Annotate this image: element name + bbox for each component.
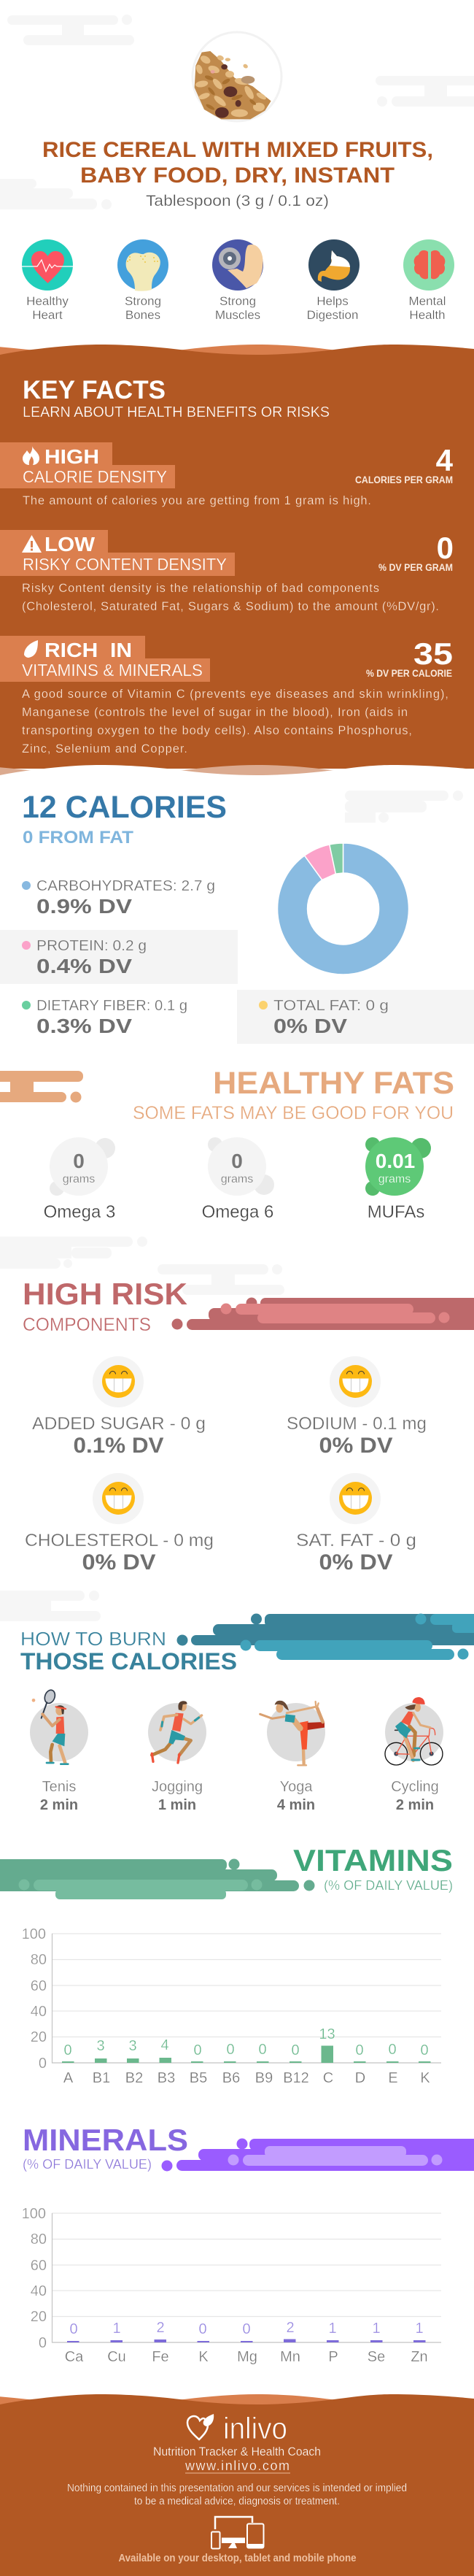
fact: rich in vitamins and minerals: Manganese (controls the level of sugar in the blood), Iron (aids in bbox=[22, 706, 408, 719]
bar chart: vitamins: K bbox=[420, 2070, 430, 2086]
bar chart: minerals: 80 bbox=[31, 2231, 47, 2248]
fact: low risky content density: 0 bbox=[437, 531, 454, 565]
header: food photo bbox=[193, 32, 281, 121]
icon: devices bbox=[211, 2517, 264, 2549]
high risk heading: HIGH RISK bbox=[23, 1277, 187, 1311]
fact: high calorie density: HIGH bbox=[44, 445, 99, 468]
bar chart: vitamins: 40 bbox=[31, 2004, 47, 2020]
panel: key facts bbox=[0, 345, 474, 780]
bar chart: minerals: P bbox=[328, 2349, 338, 2365]
bar chart: vitamins: 100 bbox=[22, 1926, 46, 1942]
minerals subheading: (% OF DAILY VALUE) bbox=[23, 2157, 152, 2172]
bar chart: minerals: 1 bbox=[372, 2321, 381, 2337]
macro: dietary fiber bbox=[22, 998, 187, 1037]
burn heading: THOSE CALORIES bbox=[20, 1648, 237, 1675]
macro: carbohydrates: CARBOHYDRATES: 2.7 g bbox=[36, 878, 215, 894]
benefit: strong bones: Bones bbox=[125, 308, 160, 322]
title: BABY FOOD, DRY, INSTANT bbox=[80, 164, 395, 188]
risk: sodium: SODIUM - 0.1 mg bbox=[287, 1414, 427, 1434]
benefit: mental health: Health bbox=[409, 308, 446, 322]
fact: low risky content density: Risky Content density is the relationship of bad components bbox=[22, 582, 379, 595]
donut chart bbox=[278, 843, 409, 974]
title bbox=[42, 138, 433, 188]
fact: rich in vitamins and minerals: A good source of Vitamin C (prevents eye diseases and skin wrinkling), bbox=[22, 688, 448, 701]
fact: low risky content density: RISKY CONTENT DENSITY bbox=[23, 555, 227, 574]
fact: high calorie density: 4 bbox=[436, 443, 454, 477]
bar chart: vitamins: 0 bbox=[291, 2042, 300, 2058]
bar chart: minerals: Cu bbox=[107, 2349, 126, 2365]
risk: added sugar: 0.1% DV bbox=[73, 1434, 163, 1458]
bar chart: vitamins bbox=[22, 1926, 441, 2086]
bar chart: vitamins: B5 bbox=[190, 2070, 207, 2086]
minerals heading: MINERALS bbox=[23, 2123, 188, 2157]
bar chart: vitamins: 20 bbox=[31, 2029, 47, 2045]
fat: mufas: 0.01 bbox=[376, 1150, 415, 1172]
bar chart: minerals: 0 bbox=[69, 2321, 78, 2337]
bar chart: vitamins: B1 bbox=[93, 2070, 110, 2086]
benefit: healthy heart bbox=[22, 239, 73, 322]
bar chart: minerals bbox=[22, 2206, 441, 2365]
icon: grinning face bbox=[102, 1365, 135, 1398]
fact: rich in vitamins and minerals: VITAMINS & MINERALS bbox=[22, 661, 203, 680]
bar chart: minerals: 1 bbox=[328, 2321, 337, 2337]
icon: grinning face bbox=[339, 1482, 372, 1515]
fat: omega 6 bbox=[202, 1137, 274, 1222]
fact: high calorie density bbox=[0, 442, 454, 507]
bar chart: minerals: 2 bbox=[156, 2320, 165, 2336]
benefit: helps digestion bbox=[307, 239, 360, 322]
fact: rich in vitamins and minerals: 35 bbox=[413, 637, 453, 671]
bar chart: vitamins: 0 bbox=[355, 2042, 364, 2058]
bar chart: vitamins: E bbox=[388, 2070, 398, 2086]
exercise: tennis bbox=[30, 1688, 88, 1813]
fat: omega 3 bbox=[44, 1137, 115, 1222]
risk: saturated fat: SAT. FAT - 0 g bbox=[296, 1531, 416, 1550]
bar chart: vitamins: 0 bbox=[258, 2042, 267, 2058]
benefit: healthy heart: Heart bbox=[32, 308, 63, 322]
bar chart: minerals: 0 bbox=[198, 2321, 207, 2337]
bar chart: minerals: 0 bbox=[242, 2321, 251, 2337]
burn heading bbox=[20, 1628, 237, 1675]
fact: rich in vitamins and minerals: RICH IN bbox=[44, 639, 132, 661]
bar chart: vitamins: B2 bbox=[125, 2070, 143, 2086]
benefit: helps digestion: Helps bbox=[316, 294, 349, 308]
benefit: mental health: Mental bbox=[408, 294, 446, 308]
vitamins subheading: (% OF DAILY VALUE) bbox=[324, 1878, 453, 1893]
benefit: strong muscles bbox=[212, 239, 263, 322]
burn banner shape bbox=[176, 1613, 474, 1660]
bar chart: minerals: 60 bbox=[31, 2258, 47, 2274]
fat: mufas: MUFAs bbox=[368, 1202, 424, 1222]
macro: protein: PROTEIN: 0.2 g bbox=[36, 938, 147, 954]
macro: carbohydrates bbox=[22, 878, 215, 918]
exercise: jogging: Jogging bbox=[152, 1779, 203, 1795]
macro: protein bbox=[0, 930, 238, 984]
fat: omega 6: grams bbox=[221, 1173, 253, 1185]
macro: total fat bbox=[237, 990, 474, 1044]
fat: omega 6: Omega 6 bbox=[202, 1202, 273, 1222]
availability note: Available on your desktop, tablet and mobile phone bbox=[118, 2552, 356, 2564]
macro: dietary fiber: DIETARY FIBER: 0.1 g bbox=[36, 998, 187, 1014]
bar chart: vitamins: B9 bbox=[255, 2070, 273, 2086]
benefit: mental health bbox=[403, 239, 454, 322]
fact: high calorie density: CALORIES PER GRAM bbox=[355, 474, 453, 485]
bar chart: minerals: Zn bbox=[411, 2349, 428, 2365]
fact: rich in vitamins and minerals: transporting oxygen to the body cells). Also contains Phosphorus, bbox=[22, 724, 412, 737]
risk: cholesterol: 0% DV bbox=[82, 1550, 156, 1575]
icon: warning bbox=[22, 535, 42, 553]
key facts subheading: LEARN ABOUT HEALTH BENEFITS OR RISKS bbox=[23, 404, 330, 420]
panel: footer bbox=[0, 2394, 474, 2576]
bar chart: vitamins: C bbox=[323, 2070, 333, 2086]
bar chart: minerals: Ca bbox=[65, 2349, 84, 2365]
healthy fats banner shape bbox=[0, 1071, 83, 1102]
bar chart: minerals: 0 bbox=[39, 2335, 47, 2351]
benefit: strong bones bbox=[117, 239, 168, 322]
calories heading: 12 CALORIES bbox=[22, 790, 227, 825]
risk: saturated fat bbox=[296, 1473, 416, 1575]
healthy fats heading: HEALTHY FATS bbox=[213, 1066, 454, 1101]
exercise: yoga: 4 min bbox=[277, 1797, 315, 1813]
risk: added sugar bbox=[32, 1356, 206, 1458]
serving size: Tablespoon (3 g / 0.1 oz) bbox=[146, 193, 329, 209]
high risk subheading: COMPONENTS bbox=[23, 1315, 151, 1335]
bar chart: minerals: Fe bbox=[152, 2349, 169, 2365]
bar chart: vitamins: 4 bbox=[160, 2037, 169, 2053]
key facts heading: KEY FACTS bbox=[23, 376, 166, 404]
exercise: cycling: Cycling bbox=[391, 1779, 439, 1795]
fat: mufas bbox=[365, 1137, 431, 1222]
logo bbox=[187, 2411, 287, 2445]
fact: rich in vitamins and minerals bbox=[0, 636, 453, 756]
disclaimer: Nothing contained in this presentation and our services is intended or implied bbox=[67, 2483, 407, 2494]
risk: added sugar: ADDED SUGAR - 0 g bbox=[32, 1414, 206, 1434]
bar chart: minerals: 2 bbox=[286, 2320, 295, 2336]
website link: www.inlivo.com bbox=[184, 2458, 290, 2473]
disclaimer bbox=[67, 2483, 407, 2507]
exercise: yoga bbox=[260, 1701, 325, 1813]
fat: mufas: grams bbox=[378, 1173, 411, 1185]
burn heading: HOW TO BURN bbox=[20, 1628, 166, 1650]
benefit: healthy heart: Healthy bbox=[26, 294, 69, 308]
vitamins heading: VITAMINS bbox=[293, 1843, 453, 1877]
bar chart: vitamins: 3 bbox=[96, 2038, 105, 2054]
bar chart: vitamins: A bbox=[63, 2070, 74, 2086]
risk: cholesterol bbox=[25, 1473, 214, 1575]
fact: high calorie density: The amount of calories you are getting from 1 gram is high. bbox=[23, 494, 371, 507]
bar chart: vitamins: 0 bbox=[39, 2056, 47, 2072]
bar chart: vitamins: 13 bbox=[319, 2026, 335, 2042]
bar chart: vitamins: B12 bbox=[283, 2070, 309, 2086]
exercise: tennis: Tenis bbox=[42, 1779, 76, 1795]
bar chart: vitamins: B6 bbox=[222, 2070, 240, 2086]
fact: low risky content density: LOW bbox=[44, 533, 96, 555]
benefit: helps digestion: Digestion bbox=[307, 308, 358, 322]
risk: cholesterol: CHOLESTEROL - 0 mg bbox=[25, 1531, 214, 1550]
bar chart: vitamins: 0 bbox=[63, 2042, 72, 2058]
bar chart: minerals: 1 bbox=[112, 2321, 121, 2337]
benefit: strong muscles: Muscles bbox=[215, 308, 260, 322]
macro: total fat: TOTAL FAT: 0 g bbox=[273, 998, 389, 1014]
bar chart: minerals: K bbox=[198, 2349, 209, 2365]
risk: saturated fat: 0% DV bbox=[319, 1550, 392, 1575]
exercise: jogging: 1 min bbox=[158, 1797, 196, 1813]
fat: omega 3: Omega 3 bbox=[44, 1202, 115, 1222]
icon: grinning face bbox=[102, 1482, 135, 1515]
bar chart: minerals: 1 bbox=[415, 2321, 424, 2337]
bar chart: vitamins: 3 bbox=[128, 2038, 137, 2054]
bar chart: vitamins: 80 bbox=[31, 1952, 47, 1968]
exercise: cycling: 2 min bbox=[396, 1797, 434, 1813]
fact: high calorie density: CALORIE DENSITY bbox=[23, 467, 167, 486]
bar chart: minerals: Se bbox=[368, 2349, 385, 2365]
minerals banner shape bbox=[162, 2139, 474, 2171]
benefit: strong bones: Strong bbox=[125, 294, 161, 308]
bar chart: vitamins: D bbox=[355, 2070, 365, 2086]
bar chart: vitamins: B3 bbox=[158, 2070, 175, 2086]
risk: sodium: 0% DV bbox=[319, 1434, 392, 1458]
bar chart: vitamins: 60 bbox=[31, 1978, 47, 1994]
fact: rich in vitamins and minerals: % DV PER CALORIE bbox=[366, 668, 452, 679]
exercise: yoga: Yoga bbox=[280, 1779, 313, 1795]
icon: grinning face bbox=[339, 1365, 372, 1398]
high risk banner shape bbox=[172, 1298, 474, 1330]
bar chart: minerals: 40 bbox=[31, 2283, 47, 2299]
fat: omega 3: 0 bbox=[73, 1150, 85, 1172]
bar chart: vitamins: 0 bbox=[388, 2042, 397, 2058]
tagline: Nutrition Tracker & Health Coach bbox=[153, 2445, 321, 2458]
bar chart: vitamins: 0 bbox=[420, 2042, 429, 2058]
benefit: strong muscles: Strong bbox=[219, 294, 256, 308]
fact: low risky content density: (Cholesterol, Saturated Fat, Sugars & Sodium) to the amount (%DV/gr). bbox=[22, 600, 439, 613]
logo: inlivo bbox=[223, 2411, 287, 2445]
bar chart: minerals: Mn bbox=[280, 2349, 300, 2365]
calories from fat: 0 FROM FAT bbox=[23, 828, 133, 847]
icon: flame bbox=[23, 446, 39, 465]
exercise: tennis: 2 min bbox=[40, 1797, 78, 1813]
bar chart: minerals: Mg bbox=[237, 2349, 257, 2365]
disclaimer: to be a medical advice, diagnosis or treatment. bbox=[134, 2496, 340, 2507]
macro: dietary fiber: 0.3% DV bbox=[36, 1015, 132, 1037]
exercise: jogging bbox=[148, 1701, 206, 1813]
macro: protein: 0.4% DV bbox=[36, 955, 132, 977]
exercise: cycling bbox=[385, 1697, 443, 1813]
bar chart: minerals: 20 bbox=[31, 2309, 47, 2325]
macro: carbohydrates: 0.9% DV bbox=[36, 895, 132, 918]
icon: leaf bbox=[24, 640, 38, 658]
bar chart: vitamins: 0 bbox=[193, 2042, 202, 2058]
fat: omega 6: 0 bbox=[231, 1150, 243, 1172]
fact: low risky content density: % DV PER GRAM bbox=[378, 562, 453, 573]
healthy fats subheading: SOME FATS MAY BE GOOD FOR YOU bbox=[133, 1103, 454, 1123]
vitamins banner shape bbox=[0, 1858, 315, 1899]
fat: omega 3: grams bbox=[63, 1173, 95, 1185]
fact: low risky content density bbox=[0, 530, 454, 613]
fact: rich in vitamins and minerals: Zinc, Selenium and Copper. bbox=[22, 742, 187, 756]
bar chart: minerals: 100 bbox=[22, 2206, 46, 2222]
bar chart: vitamins: 0 bbox=[226, 2042, 235, 2058]
title: RICE CEREAL WITH MIXED FRUITS, bbox=[42, 138, 433, 162]
macro: total fat: 0% DV bbox=[273, 1015, 347, 1037]
risk: sodium bbox=[287, 1356, 427, 1458]
